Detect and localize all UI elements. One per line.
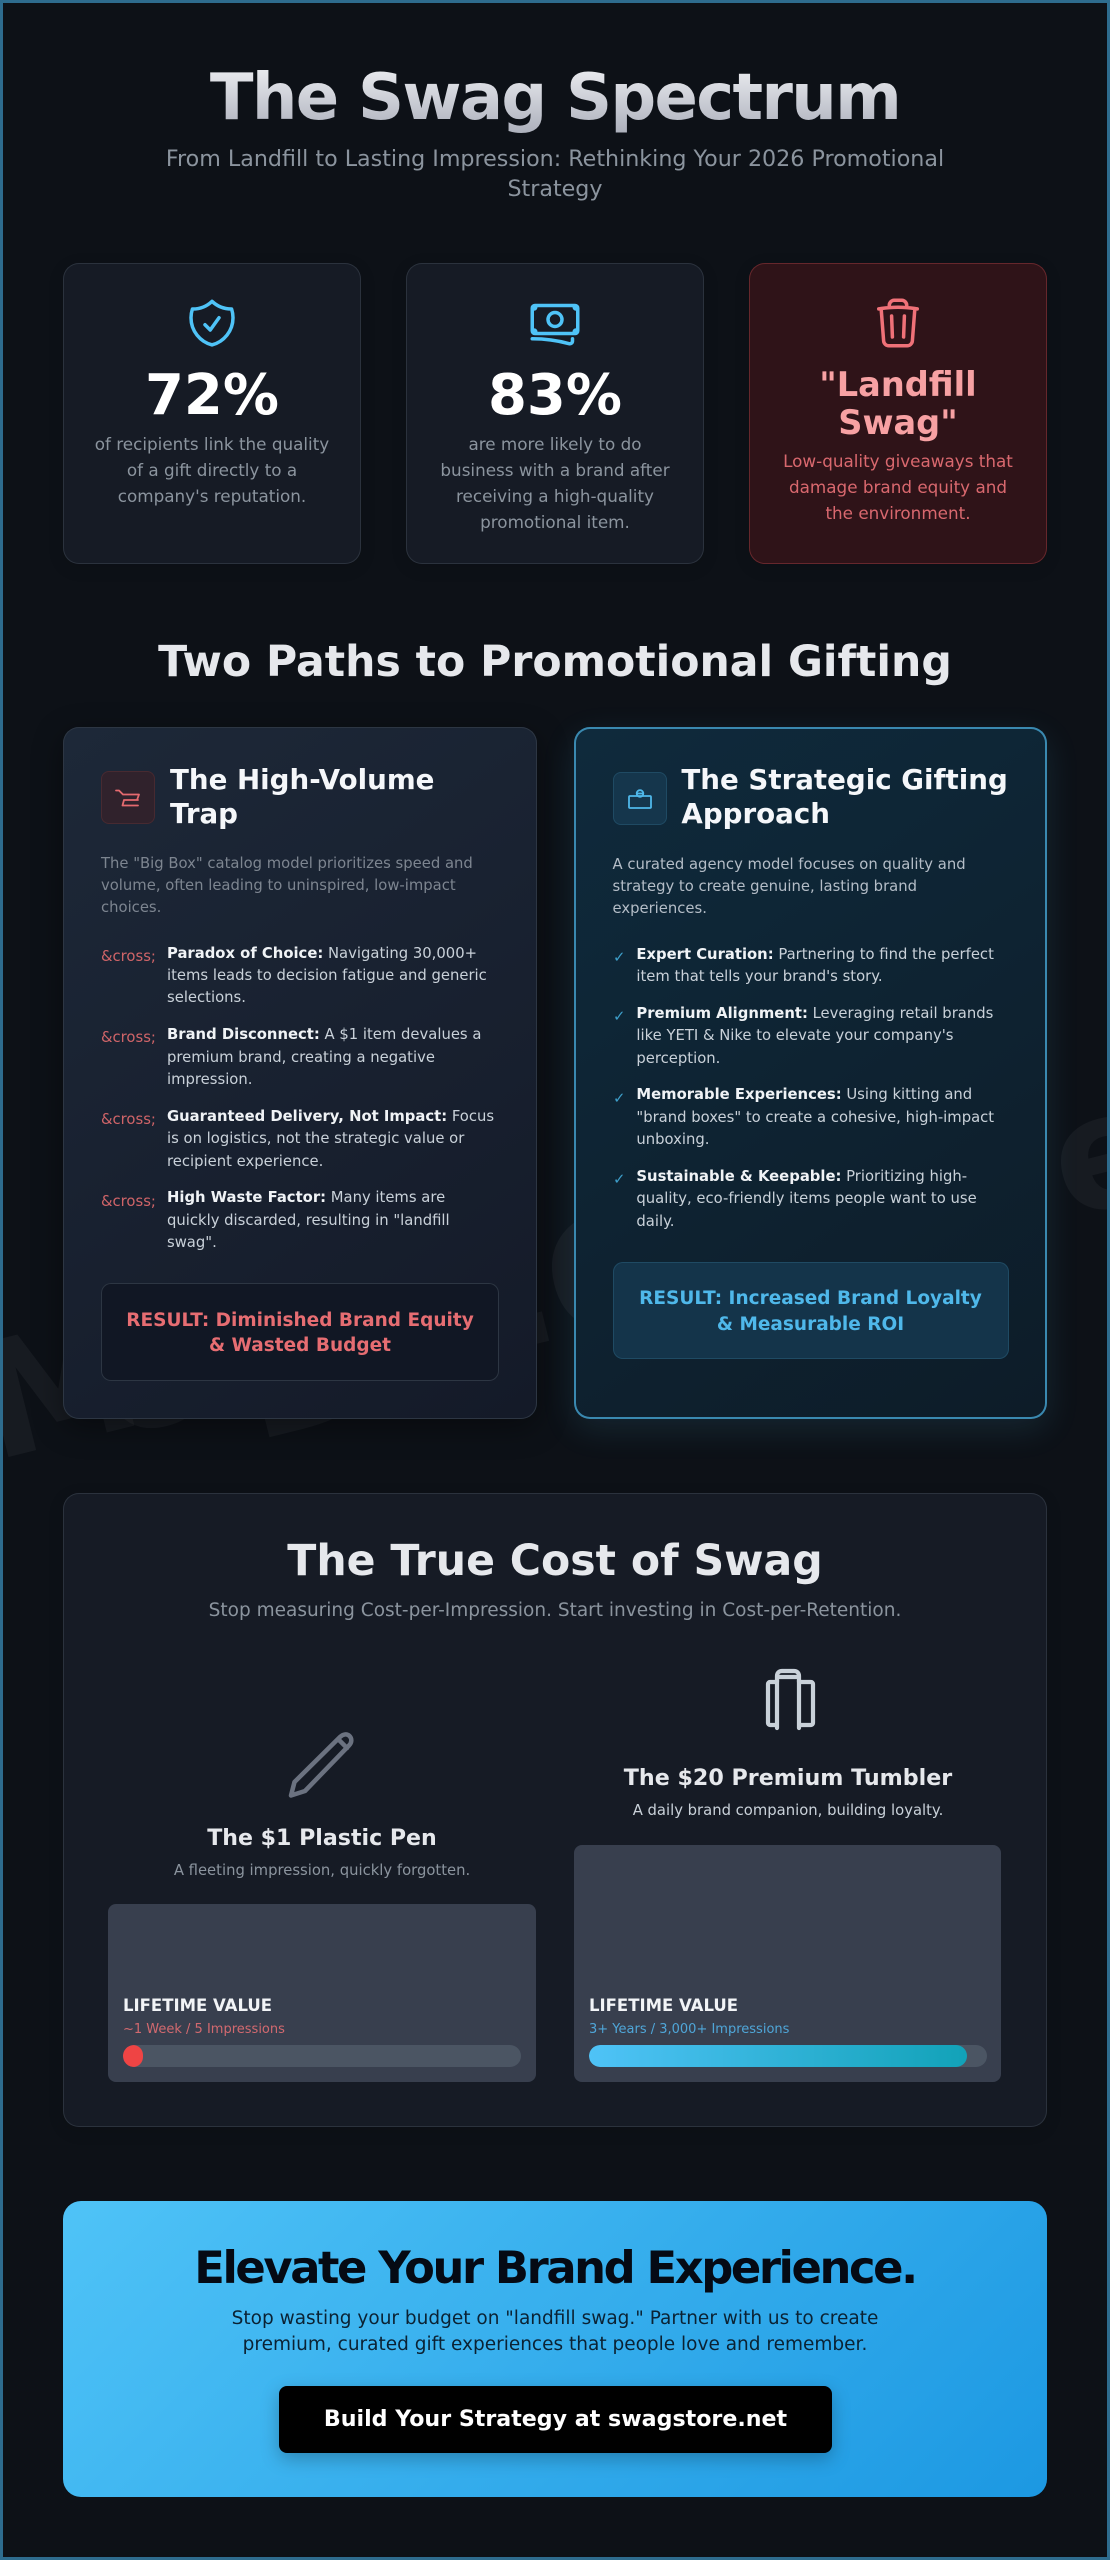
subheading: Stop measuring Cost-per-Impression. Start investing in Cost-per-Retention.	[209, 1600, 901, 1621]
text: the environment.	[825, 503, 971, 523]
label: LIFETIME VALUE	[589, 1996, 738, 2015]
panel: high-volume trap	[63, 727, 537, 1419]
title: The Swag Spectrum	[210, 60, 900, 134]
panel: strategic gifting approach	[574, 727, 1047, 1419]
list item	[613, 1086, 994, 1148]
value box: pen	[108, 1904, 536, 2082]
stat number: 83%	[488, 363, 622, 428]
panel: strategic gifting approach: unboxing.	[636, 1131, 709, 1148]
section heading: Two Paths to Promotional Gifting	[158, 637, 952, 687]
panel: strategic gifting approach: ✓	[613, 1171, 625, 1188]
subtitle: From Landfill to Lasting Impression: Rethinking Your 2026 Promotional	[166, 146, 944, 172]
progress bar	[123, 2045, 521, 2067]
panel: strategic gifting approach: perception.	[636, 1050, 720, 1066]
panel: true cost of swag	[63, 1493, 1047, 2127]
panel: strategic gifting approach: "brand boxes" to create a cohesive, high-impact	[636, 1109, 994, 1126]
stat text: receiving a high-quality	[456, 486, 654, 506]
panel: high-volume trap: High Waste Factor: Many items are	[167, 1189, 445, 1206]
heading	[681, 763, 1008, 830]
stat text: business with a brand after	[440, 460, 670, 480]
text	[783, 451, 1013, 523]
text	[232, 2308, 878, 2355]
text: damage brand equity and	[789, 477, 1007, 497]
value text: ~1 Week / 5 Impressions	[123, 2022, 285, 2037]
panel: high-volume trap: swag".	[167, 1234, 217, 1251]
panel: high-volume trap: recipient experience.	[167, 1152, 323, 1170]
icon: briefcase	[612, 772, 666, 825]
panel: high-volume trap: &cross;	[101, 948, 156, 965]
list item	[101, 944, 487, 1006]
stat text: of a gift directly to a	[127, 460, 297, 480]
panel: high-volume trap: selections.	[167, 989, 246, 1006]
item heading: The $1 Plastic Pen	[207, 1825, 437, 1851]
icon: tumbler	[766, 1668, 816, 1730]
stat text	[95, 434, 329, 506]
panel: high-volume trap: premium brand, creating a negative	[167, 1048, 435, 1066]
button: Build Your Strategy at swagstore.net	[324, 2406, 787, 2432]
stat number: 72%	[145, 363, 279, 428]
list item	[101, 1108, 494, 1170]
description: The "Big Box" catalog model prioritizes speed and	[101, 854, 473, 872]
subtitle: Strategy	[507, 176, 603, 202]
text: premium, curated gift experiences that people love and remember.	[243, 2334, 867, 2355]
value box: tumbler	[574, 1845, 1001, 2082]
description: A curated agency model focuses on quality and	[612, 856, 966, 872]
result callout	[612, 1262, 1008, 1359]
panel: strategic gifting approach: Sustainable & Keepable: Prioritizing high-	[636, 1168, 967, 1185]
panel: strategic gifting approach: quality, eco-friendly items people want to use	[636, 1190, 977, 1207]
icon: shield check	[189, 300, 235, 347]
result callout: RESULT: Increased Brand Loyalty	[639, 1288, 982, 1309]
icon: banknotes	[530, 304, 580, 346]
panel: strategic gifting approach: daily.	[636, 1213, 674, 1230]
icon: trash	[877, 298, 919, 348]
panel: stat 83%	[406, 263, 704, 564]
list item	[101, 1189, 450, 1251]
heading	[819, 365, 977, 442]
result callout: & Measurable ROI	[717, 1314, 904, 1335]
heading: The True Cost of Swag	[287, 1536, 823, 1586]
description: strategy to create genuine, lasting brand	[612, 878, 917, 895]
panel: strategic gifting approach: ✓	[613, 949, 625, 966]
list item	[101, 1026, 481, 1088]
panel: high-volume trap: Paradox of Choice: Navigating 30,000+	[167, 944, 477, 962]
heading: The High-Volume	[170, 763, 434, 796]
heading: Swag"	[838, 402, 958, 442]
heading: Elevate Your Brand Experience.	[194, 2240, 916, 2294]
panel: landfill swag	[749, 263, 1047, 564]
panel: strategic gifting approach: Expert Curation: Partnering to find the perfect	[636, 946, 994, 962]
progress bar	[589, 2045, 987, 2067]
list item	[613, 1005, 993, 1066]
panel: strategic gifting approach: ✓	[613, 1008, 625, 1025]
icon: pen	[288, 1732, 354, 1798]
item heading: The $20 Premium Tumbler	[624, 1765, 952, 1791]
description: volume, often leading to uninspired, low-impact	[101, 877, 456, 894]
panel: strategic gifting approach: Memorable Experiences: Using kitting and	[636, 1086, 972, 1103]
result callout: RESULT: Diminished Brand Equity	[126, 1310, 474, 1331]
stat text: promotional item.	[480, 512, 630, 532]
panel: strategic gifting approach: ✓	[613, 1090, 625, 1107]
stat text: of recipients link the quality	[95, 434, 329, 454]
stat text: are more likely to do	[468, 434, 642, 454]
result callout: & Wasted Budget	[209, 1335, 391, 1356]
text: Low-quality giveaways that	[783, 451, 1013, 471]
stat text: company's reputation.	[118, 486, 306, 506]
value text: 3+ Years / 3,000+ Impressions	[589, 2022, 789, 2037]
panel: high-volume trap: &cross;	[101, 1029, 156, 1046]
list item	[613, 1168, 977, 1230]
icon: cart	[101, 771, 155, 824]
button	[279, 2386, 832, 2453]
panel: call to action	[63, 2201, 1047, 2497]
panel: strategic gifting approach: like YETI & Nike to elevate your company's	[636, 1027, 953, 1044]
label: LIFETIME VALUE	[123, 1996, 272, 2015]
panel: stat 72%	[63, 263, 361, 564]
panel: strategic gifting approach: Premium Alignment: Leveraging retail brands	[636, 1005, 993, 1022]
title	[0, 58, 1110, 136]
panel: high-volume trap: impression.	[167, 1071, 252, 1088]
stat text	[440, 434, 670, 532]
panel: strategic gifting approach: item that tells your brand's story.	[636, 968, 883, 985]
heading: Trap	[170, 797, 238, 830]
result callout	[101, 1283, 499, 1380]
description	[612, 856, 966, 917]
heading	[170, 763, 434, 830]
description: experiences.	[612, 900, 707, 917]
panel: high-volume trap: is on logistics, not the strategic value or	[167, 1130, 464, 1147]
panel: high-volume trap: Guaranteed Delivery, Not Impact: Focus	[167, 1108, 494, 1125]
panel: high-volume trap: quickly discarded, resulting in "landfill	[167, 1212, 450, 1229]
panel: high-volume trap: &cross;	[101, 1111, 156, 1128]
panel: high-volume trap: &cross;	[101, 1193, 156, 1210]
item text: A daily brand companion, building loyalty.	[633, 1802, 943, 1819]
panel: high-volume trap: Brand Disconnect: A $1 item devalues a	[167, 1026, 481, 1043]
heading: Approach	[681, 797, 830, 830]
description	[100, 854, 473, 916]
text: Stop wasting your budget on "landfill swag." Partner with us to create	[232, 2308, 878, 2329]
list item	[613, 946, 994, 985]
heading: "Landfill	[819, 365, 977, 404]
subtitle	[166, 146, 944, 202]
panel: high-volume trap: items leads to decision fatigue and generic	[167, 967, 487, 984]
description: choices.	[101, 899, 161, 916]
item text: A fleeting impression, quickly forgotten.	[174, 1862, 470, 1879]
heading: The Strategic Gifting	[681, 763, 1008, 796]
